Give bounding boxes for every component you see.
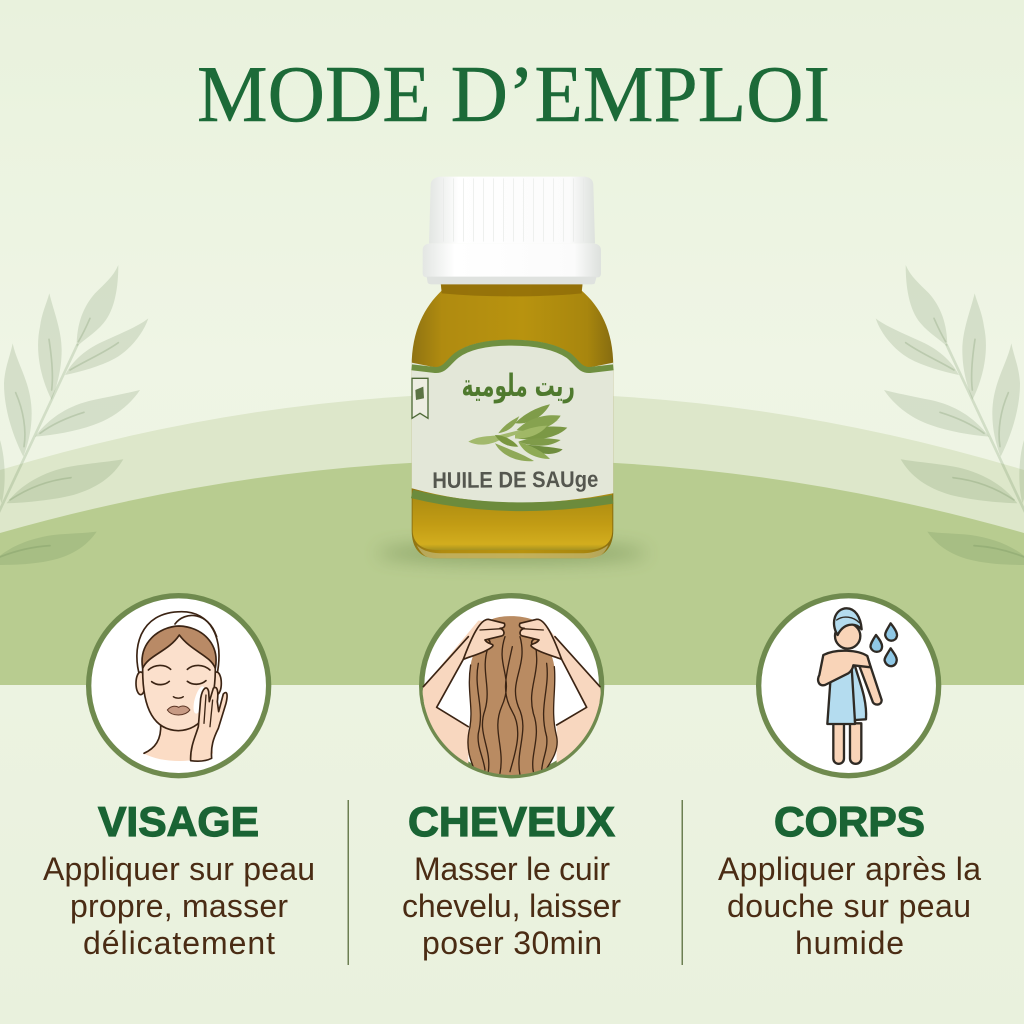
- face illustration: [136, 612, 227, 761]
- text: cheveux instructions: Masser le cuir: [414, 851, 610, 887]
- icon: face care: [89, 596, 269, 776]
- hair illustration: [420, 616, 603, 777]
- turban: [834, 608, 862, 635]
- logo on label: [412, 378, 428, 418]
- nose: [173, 697, 183, 698]
- bottle cap: [423, 177, 601, 284]
- column: cheveux: [402, 798, 621, 961]
- text: cheveux instructions: [402, 851, 621, 961]
- text: visage instructions: [43, 851, 315, 961]
- legs: [833, 723, 861, 764]
- icon: hair massage: [420, 596, 603, 777]
- icon: body after shower: [759, 596, 939, 776]
- text: visage instructions: Appliquer sur peau: [43, 851, 315, 887]
- towel figure: [818, 608, 897, 764]
- text: corps instructions: [718, 851, 981, 961]
- oil neck surface: [441, 283, 583, 296]
- bottle body: [412, 283, 613, 558]
- eyes and brows: [148, 665, 210, 685]
- text: visage instructions: propre, masser: [70, 888, 288, 924]
- text: corps instructions: humide: [795, 925, 904, 961]
- head: [835, 623, 860, 649]
- face: [143, 630, 215, 731]
- arm right: [858, 657, 882, 705]
- left arm: [422, 620, 483, 707]
- text: cheveux instructions: poser 30min: [422, 925, 602, 961]
- text: cheveux instructions: chevelu, laisser: [402, 888, 621, 924]
- bottle label: [412, 340, 613, 503]
- label lower band: [412, 494, 613, 507]
- bottle shadow: [377, 543, 647, 563]
- water drops: [871, 635, 882, 652]
- headband: [137, 612, 219, 677]
- neck and shoulders: [144, 725, 214, 761]
- hand: [191, 687, 227, 761]
- hair strands: [468, 637, 557, 777]
- hair: [467, 616, 557, 777]
- shoulders and arm: [818, 651, 871, 685]
- text: corps instructions: Appliquer après la: [718, 851, 981, 887]
- right arm: [550, 631, 601, 707]
- heading: cheveux: CHEVEUX: [408, 798, 615, 845]
- sage sprig: [468, 404, 567, 461]
- decorative leaf branch left: [0, 265, 148, 565]
- cotton pad: [194, 686, 204, 714]
- text: visage instructions: délicatement: [83, 925, 275, 961]
- ears: [136, 672, 145, 695]
- title: MODE D’EMPLOI: [197, 49, 830, 139]
- lips: [167, 706, 190, 715]
- shoulders: [424, 701, 600, 764]
- heading: visage: VISAGE: [98, 798, 259, 845]
- hair: [142, 626, 216, 668]
- label arch border: [412, 343, 613, 370]
- background hills: [0, 393, 1024, 685]
- heading: corps: CORPS: [774, 798, 925, 845]
- towel: [827, 663, 866, 724]
- hands: [487, 640, 491, 643]
- column: corps: [718, 798, 981, 961]
- product bottle: [412, 177, 613, 558]
- text: corps instructions: douche sur peau: [727, 888, 971, 924]
- oil lower section: [413, 493, 612, 550]
- decorative leaf branch right: [876, 265, 1024, 565]
- arabic product name: ريت ملومية: [462, 369, 575, 404]
- label product name: HUILE DE SAUge: [432, 466, 598, 493]
- column: visage: [43, 798, 315, 961]
- glass base: [417, 545, 608, 558]
